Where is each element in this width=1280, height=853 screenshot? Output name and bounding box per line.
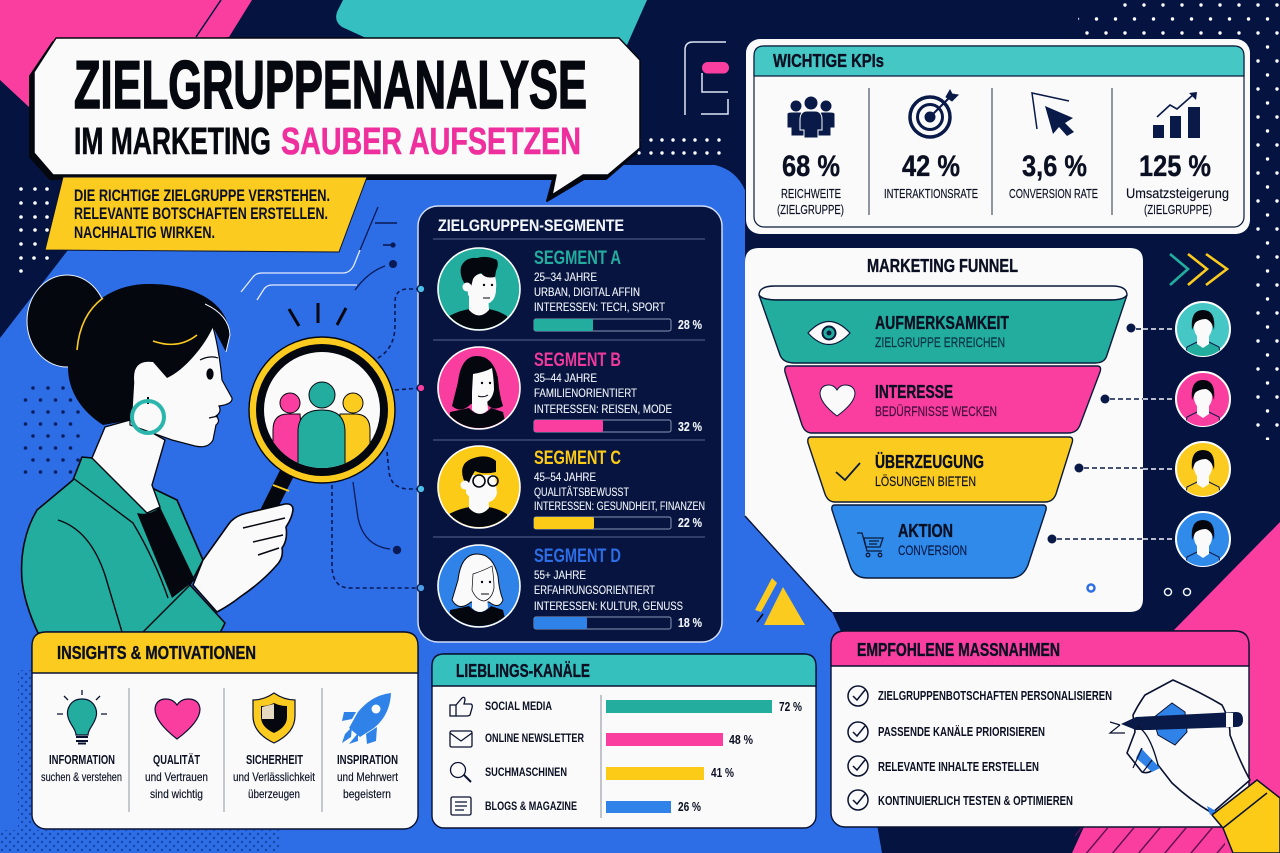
- icon: people: [787, 96, 835, 138]
- icon: light bulb: [57, 690, 107, 744]
- icon: target: [910, 90, 958, 137]
- KPI labels: (ZIELGRUPPE): [777, 203, 844, 217]
- bar chart: channels: 26 %: [678, 799, 701, 814]
- funnel heading: MARKETING FUNNEL: [867, 256, 1018, 276]
- avatar: funnel pink: [1176, 372, 1230, 429]
- insight column: sicherheit: [233, 752, 316, 801]
- insights heading: INSIGHTS & MOTIVATIONEN: [57, 643, 256, 663]
- segment D text: INTERESSEN: KULTUR, GENUSS: [534, 599, 683, 613]
- funnel stage: aufmerksamkeit: [759, 295, 1127, 363]
- KPI labels: CONVERSION RATE: [1009, 187, 1098, 201]
- panel heading: ZIELGRUPPEN-SEGMENTE: [438, 216, 624, 235]
- channel labels: ONLINE NEWSLETTER: [485, 731, 584, 745]
- bar chart: channels: 72 %: [779, 699, 802, 714]
- insight column: qualitaet: sind wichtig: [150, 787, 203, 801]
- check item 2: [848, 722, 1045, 742]
- bar chart: channels: 48 %: [729, 732, 753, 747]
- insight column: qualitaet: und Vertrauen: [145, 770, 208, 784]
- funnel stage: aktion: [832, 505, 1046, 578]
- earring: [132, 397, 164, 433]
- panel: insights und motivationen: [32, 632, 418, 829]
- yellow subtitle banner: DIE RICHTIGE ZIELGRUPPE VERSTEHEN.: [74, 186, 330, 205]
- title speech bubble: [30, 38, 640, 201]
- insight column: sicherheit: SICHERHEIT: [246, 752, 303, 767]
- check item 3: [848, 756, 1039, 776]
- KPI values: 125 %: [1139, 150, 1211, 183]
- funnel stage: interesse: BEDÜRFNISSE WECKEN: [875, 402, 997, 419]
- segment B text: [534, 350, 672, 416]
- check item 3: RELEVANTE INHALTE ERSTELLEN: [878, 759, 1039, 774]
- segment D text: [534, 546, 683, 613]
- KPI heading: WICHTIGE KPIs: [773, 51, 884, 71]
- check item 1: ZIELGRUPPENBOTSCHAFTEN PERSONALISIEREN: [878, 688, 1112, 703]
- funnel stage: aktion: CONVERSION: [898, 542, 967, 558]
- KPI labels: REICHWEITE: [781, 187, 841, 201]
- funnel rim: [759, 286, 1127, 300]
- avatar: funnel blue: [1176, 512, 1230, 569]
- segment A text: INTERESSEN: TECH, SPORT: [534, 300, 666, 314]
- icon: shield: [253, 693, 295, 743]
- dashed connectors from magnifier to segments: [332, 289, 421, 588]
- avatar: segment C: [438, 446, 520, 537]
- segment A text: 25–34 JAHRE: [534, 270, 597, 284]
- icon: thumbs up: [450, 697, 472, 716]
- icon: growth chart: [1153, 92, 1200, 138]
- check item 2: PASSENDE KANÄLE PRIORISIEREN: [878, 724, 1045, 739]
- decorative bracket with pink pill: [685, 42, 729, 115]
- illustration: woman with magnifying glass: [22, 275, 395, 633]
- dots: beside title: [637, 138, 721, 155]
- icon: magnifier: [450, 762, 471, 782]
- funnel stage: aufmerksamkeit: ZIELGRUPPE ERREICHEN: [875, 334, 1005, 350]
- icon: envelope: [450, 731, 472, 747]
- avatar: funnel yellow: [1176, 442, 1230, 499]
- panel: lieblings-kanaele: [432, 654, 816, 828]
- title line one: ZIELGRUPPENANALYSE: [74, 47, 587, 123]
- jacket lines: [58, 478, 203, 632]
- bar chart: channels: [606, 699, 802, 814]
- panel: empfohlene massnahmen: [831, 631, 1249, 827]
- sleeve: [1212, 780, 1280, 853]
- KPI values: 3,6 %: [1022, 150, 1087, 183]
- magnifier lens: [249, 337, 395, 483]
- avatar: segment B: [438, 347, 520, 438]
- segment B bar: [534, 420, 702, 434]
- check item 4: [848, 790, 1073, 810]
- magnifier handle: [266, 473, 289, 515]
- illustration: writing hand: [1110, 680, 1280, 853]
- decorative yellow triangle: [755, 578, 805, 625]
- finger lines: [243, 518, 285, 555]
- avatar: segment D: [438, 545, 520, 636]
- small blue marker: [1088, 584, 1094, 592]
- segment D text: SEGMENT D: [534, 546, 621, 567]
- yellow subtitle banner: NACHHALTIG WIRKEN.: [74, 223, 215, 242]
- segment A text: [534, 248, 666, 314]
- avatar: segment A: [438, 248, 520, 339]
- channel labels: SUCHMASCHINEN: [485, 765, 567, 779]
- insight column: qualitaet: [145, 752, 208, 801]
- people in lens: [272, 382, 370, 468]
- check item 4: KONTINUIERLICH TESTEN & OPTIMIEREN: [878, 793, 1073, 808]
- segment C text: [534, 448, 705, 513]
- funnel connectors: [1048, 324, 1172, 544]
- yellow subtitle banner: RELEVANTE BOTSCHAFTEN ERSTELLEN.: [74, 204, 328, 223]
- funnel stage: ueberzeugung: ÜBERZEUGUNG: [875, 451, 984, 472]
- KPI labels: [777, 186, 1229, 217]
- insight column: inspiration: und Mehrwert: [337, 770, 399, 784]
- segment C bar: 22 %: [678, 516, 702, 530]
- funnel stage: aktion: AKTION: [898, 520, 953, 541]
- icon: rocket: [342, 693, 391, 744]
- segment B text: SEGMENT B: [534, 350, 621, 371]
- segment A bar: 28 %: [678, 318, 702, 332]
- halftone dots behind person: [22, 385, 80, 475]
- segment B text: 35–44 JAHRE: [534, 371, 597, 385]
- funnel stage: ueberzeugung: LÖSUNGEN BIETEN: [875, 472, 976, 489]
- insight column: inspiration: [337, 752, 399, 801]
- segment D bar: 18 %: [678, 616, 702, 630]
- insight column: information: INFORMATION: [49, 752, 115, 767]
- funnel stage: ueberzeugung: [808, 437, 1073, 502]
- insight column: qualitaet: QUALITÄT: [153, 752, 200, 767]
- magnifier rays: [289, 303, 346, 326]
- actions heading: EMPFOHLENE MASSNAHMEN: [857, 640, 1060, 660]
- icon: heart: [155, 699, 200, 739]
- black shirt: [137, 507, 195, 598]
- title line two: [74, 121, 581, 163]
- KPI values: 68 %: [782, 150, 840, 183]
- yellow subtitle banner: [45, 177, 367, 252]
- KPI values: 42 %: [902, 150, 960, 183]
- title line two: SAUBER AUFSETZEN: [281, 121, 581, 163]
- insight column: inspiration: INSPIRATION: [337, 752, 398, 767]
- funnel stage: aufmerksamkeit: AUFMERKSAMKEIT: [875, 312, 1010, 333]
- insight column: sicherheit: und Verlässlichkeit: [233, 770, 316, 784]
- solid connector with dot: [353, 482, 401, 554]
- segment C text: SEGMENT C: [534, 448, 621, 469]
- icon: document: [451, 797, 471, 815]
- channels heading: LIEBLINGS-KANÄLE: [456, 661, 590, 681]
- panel: marketing funnel: [745, 248, 1143, 612]
- neck and chest: [92, 420, 165, 513]
- segment D bar: [534, 616, 702, 630]
- KPI labels: Umsatzsteigerung: [1126, 186, 1229, 201]
- connector dots on panel edge: [417, 285, 425, 592]
- head and face: [130, 320, 232, 447]
- funnel stage: interesse: INTERESSE: [875, 381, 953, 402]
- insight column: sicherheit: überzeugen: [248, 787, 300, 801]
- segment C bar: [534, 516, 702, 530]
- channel labels: [485, 699, 584, 813]
- channel labels: SOCIAL MEDIA: [485, 699, 552, 713]
- KPI labels: (ZIELGRUPPE): [1144, 203, 1212, 217]
- funnel stage: interesse: [785, 366, 1101, 433]
- segment D text: ERFAHRUNGSORIENTIERT: [534, 583, 656, 597]
- segment B text: INTERESSEN: REISEN, MODE: [534, 402, 672, 416]
- segment C text: 45–54 JAHRE: [534, 470, 596, 484]
- icon: cursor: [1032, 93, 1074, 136]
- segment D text: 55+ JAHRE: [534, 568, 586, 582]
- segment B text: FAMILIENORIENTIERT: [534, 386, 638, 400]
- panel: wichtige KPIs: [746, 39, 1250, 234]
- decorative circuit lines: [241, 207, 397, 300]
- segment A text: URBAN, DIGITAL AFFIN: [534, 285, 640, 299]
- segment B bar: 32 %: [678, 420, 702, 434]
- insight column: inspiration: begeistern: [343, 787, 391, 801]
- KPI labels: INTERAKTIONSRATE: [884, 187, 978, 201]
- bun: [27, 275, 107, 367]
- segment C text: QUALITÄTSBEWUSST: [534, 485, 629, 499]
- ear: [134, 362, 155, 398]
- avatar: funnel teal: [1176, 302, 1230, 359]
- small outline circles: [1164, 588, 1190, 596]
- hair highlights: [77, 298, 197, 350]
- bar chart: channels: 41 %: [711, 765, 734, 780]
- hair: [68, 284, 230, 425]
- check item 1: [848, 686, 1112, 706]
- chevrons: [1170, 254, 1227, 285]
- channel labels: BLOGS & MAGAZINE: [485, 799, 577, 813]
- segment A text: SEGMENT A: [534, 248, 621, 269]
- segment A bar: [534, 318, 702, 332]
- title line two: IM MARKETING: [74, 121, 271, 163]
- segment C text: INTERESSEN: GESUNDHEIT, FINANZEN: [534, 499, 705, 513]
- hair outline highlight: [205, 304, 230, 352]
- dots: top left column: [19, 187, 49, 273]
- KPI values: [782, 150, 1211, 183]
- jacket: [22, 457, 225, 633]
- insight column: information: suchen & verstehen: [41, 770, 122, 784]
- eye, brow and mouth: [200, 357, 218, 418]
- hand: [193, 504, 293, 612]
- insight column: information: [41, 752, 122, 784]
- panel: zielgruppen-segmente: [417, 206, 722, 642]
